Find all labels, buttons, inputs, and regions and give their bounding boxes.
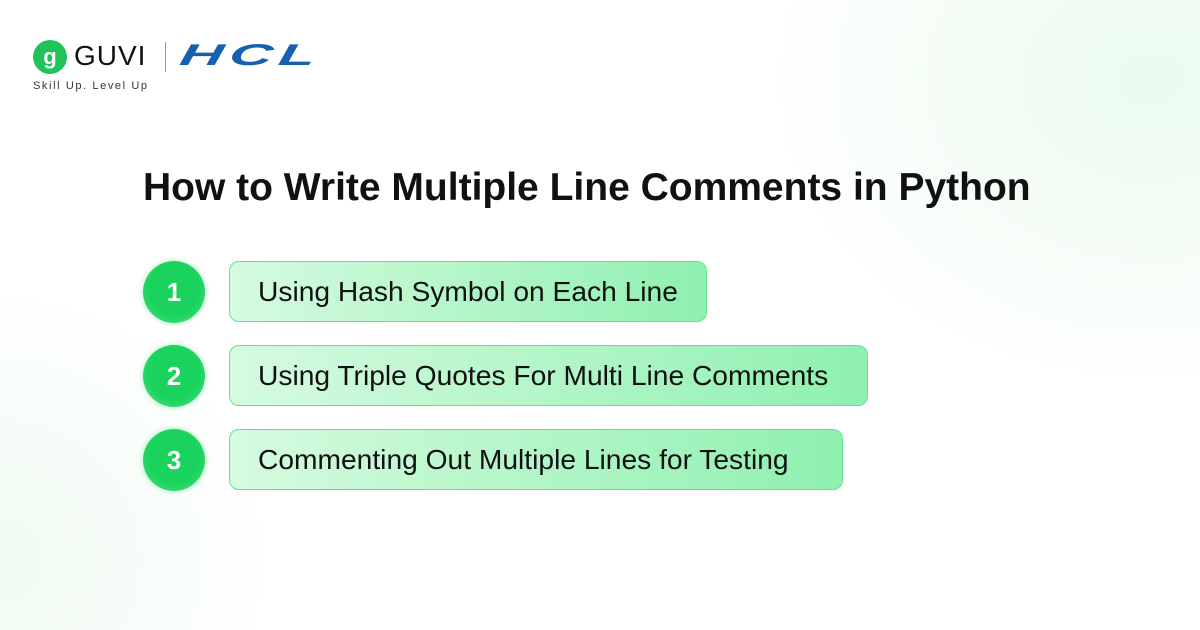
box 1 [229,261,707,322]
box 1: Using Hash Symbol on Each Line [258,275,678,307]
box 3: Commenting Out Multiple Lines for Testing [258,443,789,475]
circle 2: 2 [167,360,181,390]
circle 3 [143,429,205,491]
box 2: Using Triple Quotes For Multi Line Comments [258,359,828,391]
title: How to Write Multiple Line Comments in Python [143,166,1031,209]
logo [33,39,324,92]
icon: guvi: g [43,44,57,69]
icon: guvi [33,40,67,74]
circle 1 [143,261,205,323]
hcl text: HCL [177,39,324,72]
item 1 [140,258,707,326]
circle 3: 3 [167,444,181,474]
box 3 [229,429,843,490]
circle 1: 1 [167,276,181,306]
item 2 [140,342,868,410]
item 3 [140,426,843,494]
circle 2 [143,345,205,407]
box 2 [229,345,868,406]
tagline: Skill Up. Level Up [33,80,149,92]
guvi text: GUVI [74,40,146,71]
